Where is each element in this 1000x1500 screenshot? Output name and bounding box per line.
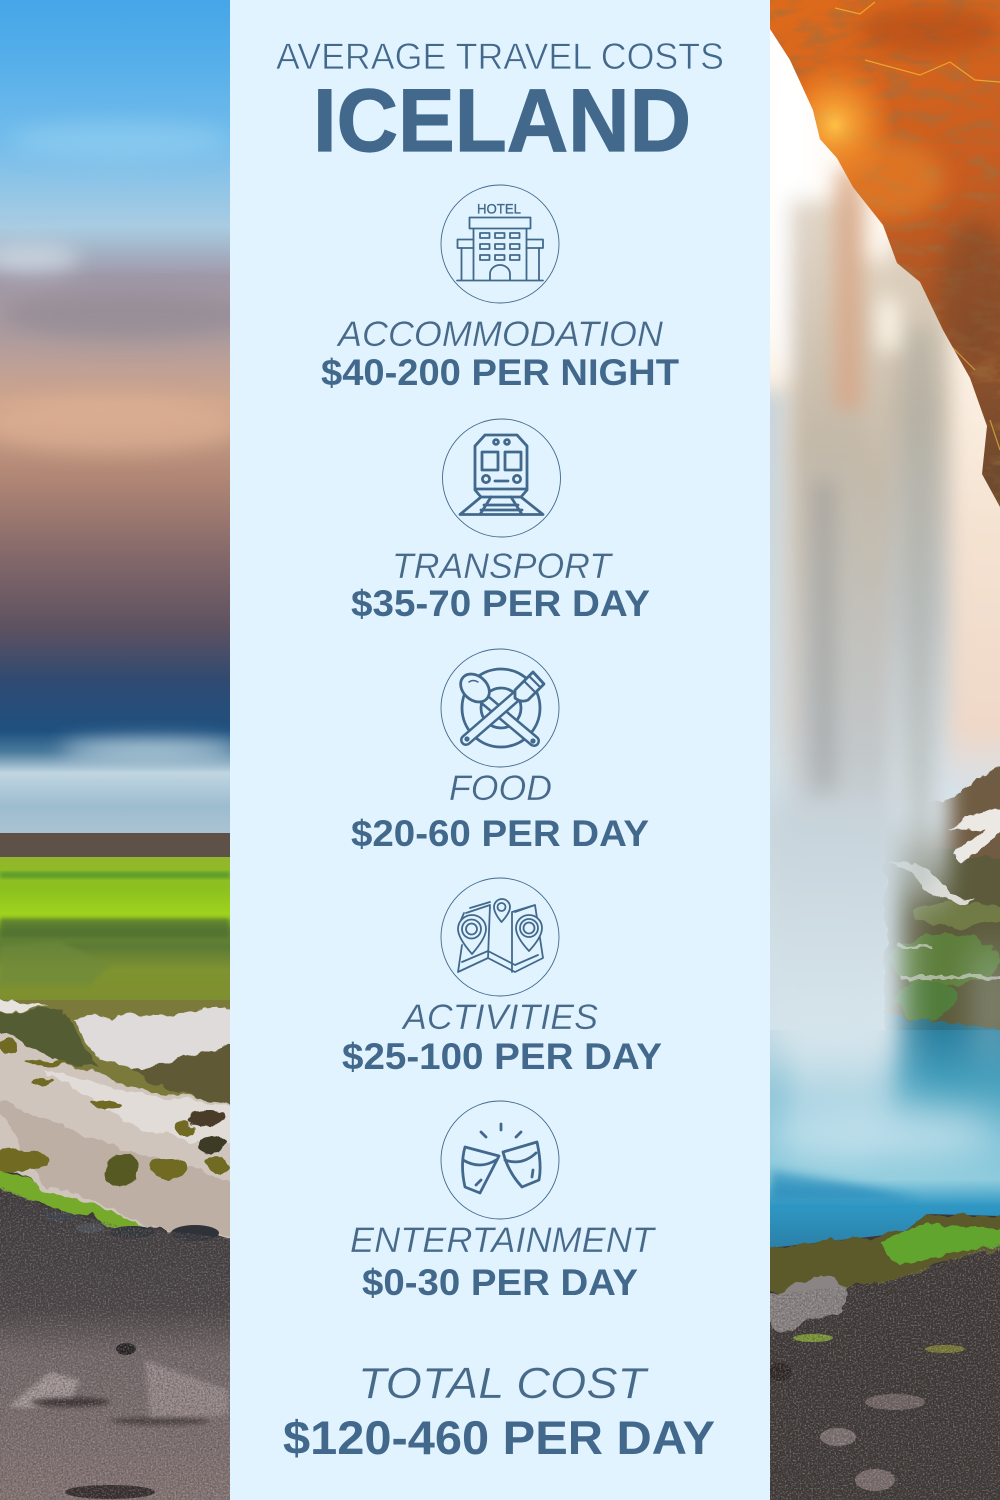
price: entertainment: $0-30 PER DAY (362, 1262, 638, 1303)
icon: train (442, 419, 560, 537)
central light-blue panel (230, 0, 770, 1500)
title: Iceland: ICELAND (313, 70, 691, 170)
label: transport: TRANSPORT (392, 547, 614, 586)
title: average travel costs: AVERAGE TRAVEL COSTS (276, 36, 724, 77)
icon: clinking glasses (441, 1101, 559, 1219)
icon: food (441, 649, 559, 767)
price: transport: $35-70 PER DAY (351, 583, 650, 624)
price: food: $20-60 PER DAY (351, 813, 649, 854)
icon: map with pins (441, 878, 559, 996)
icon: hotel (441, 185, 559, 303)
icon: hotel: HOTEL (477, 200, 521, 216)
label: activities: ACTIVITIES (401, 998, 598, 1037)
label: total cost: TOTAL COST (358, 1359, 649, 1408)
photo: left landscape with sky, green fields, snow and gravel (0, 0, 230, 1500)
price: accommodation: $40-200 PER NIGHT (321, 352, 679, 393)
photo: right waterfall with orange cliff, hill, blue pool and gravel (750, 0, 1000, 1500)
label: entertainment: ENTERTAINMENT (350, 1221, 657, 1260)
label: accommodation: ACCOMMODATION (336, 315, 664, 354)
label: food: FOOD (449, 769, 552, 808)
price: activities: $25-100 PER DAY (342, 1036, 662, 1077)
price: total cost: $120-460 PER DAY (283, 1411, 715, 1464)
